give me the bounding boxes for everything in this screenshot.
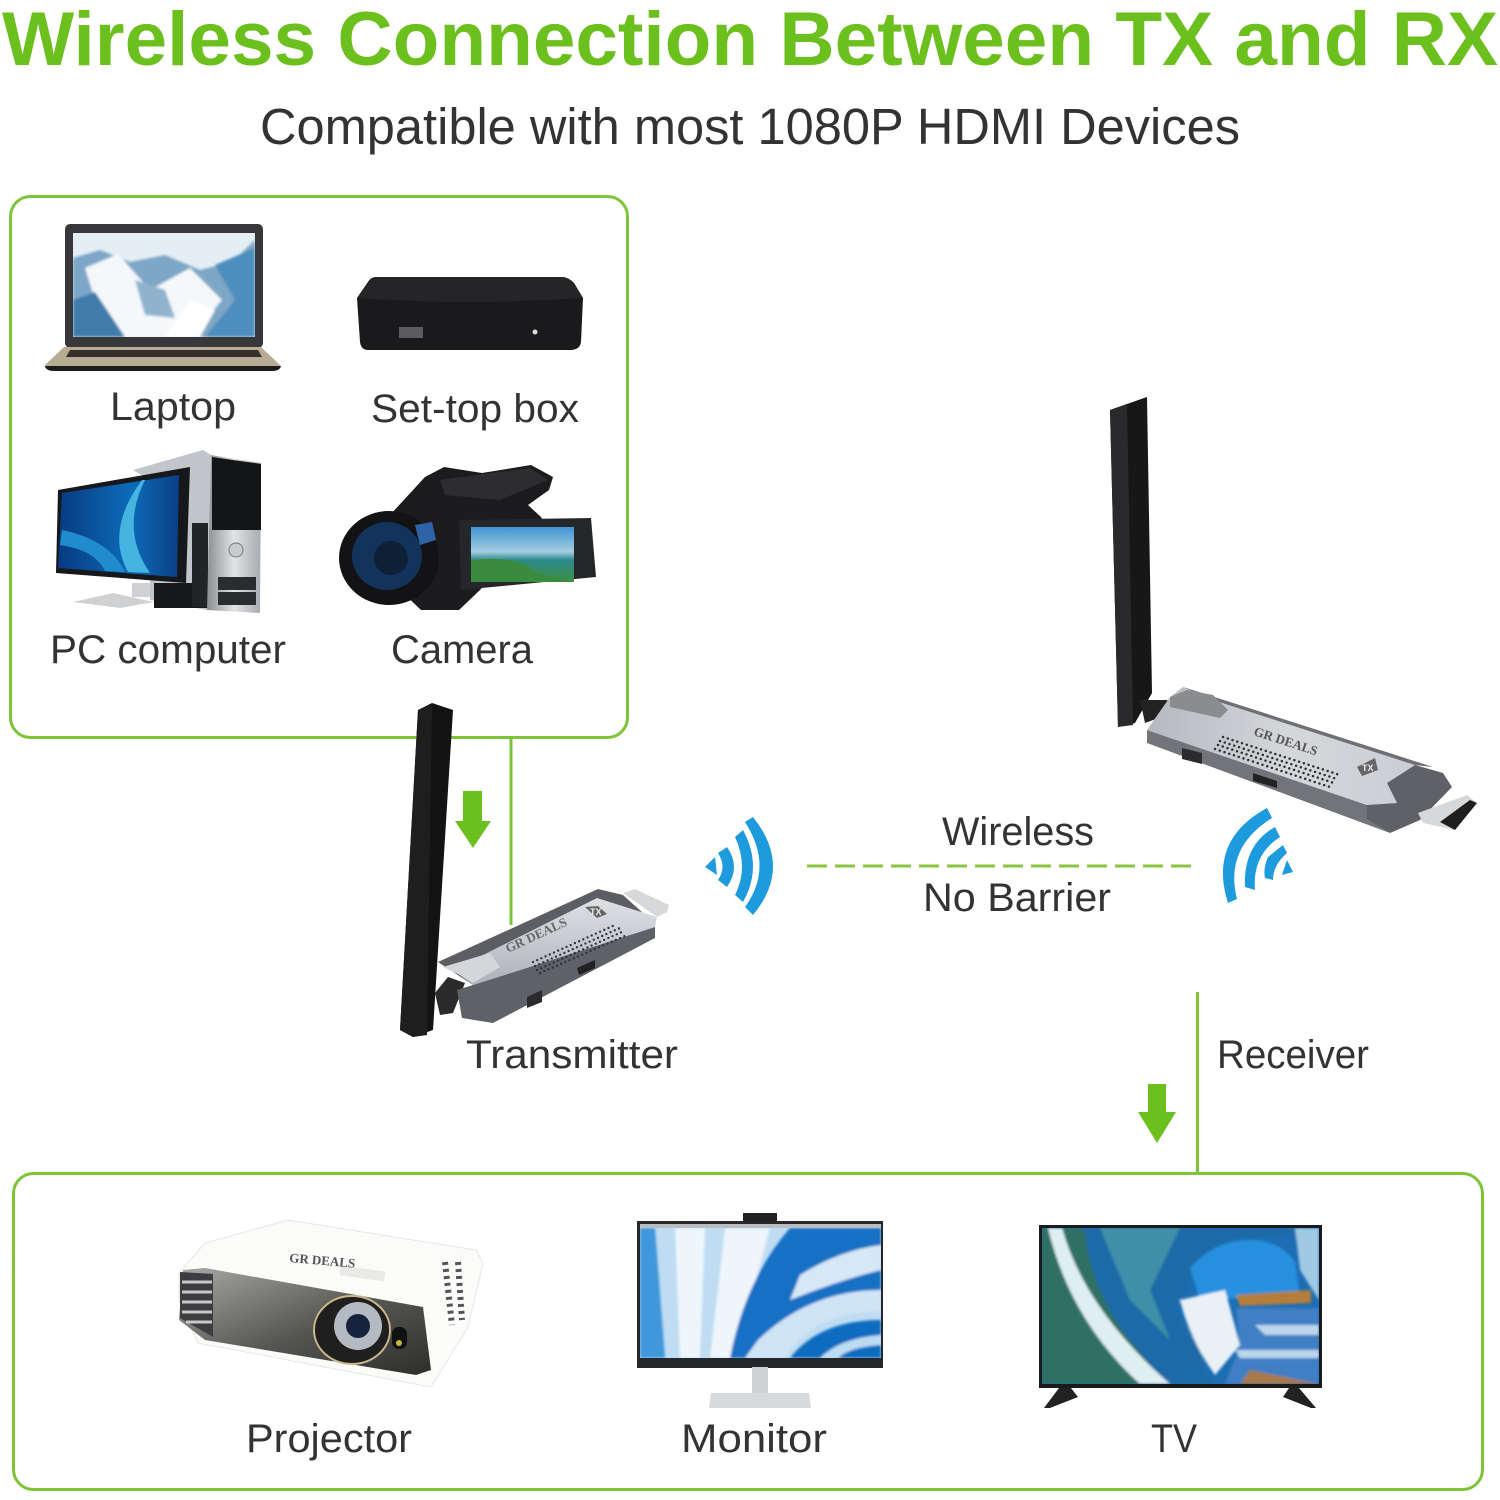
- icon: camera: [339, 465, 596, 610]
- hinge: [435, 977, 465, 1015]
- icon: TV: [1039, 1225, 1322, 1408]
- panel: source devices: [10, 196, 628, 738]
- subtitle: Compatible with most 1080P HDMI Devices: [260, 98, 1240, 155]
- top plate: [453, 898, 657, 985]
- icon: projector: GR DEALS: [289, 1250, 356, 1271]
- brand: GR DEALS: [1252, 724, 1320, 758]
- top plate: [1147, 687, 1433, 805]
- receiver device: [1110, 397, 1477, 833]
- label: laptop: Laptop: [110, 385, 236, 429]
- switch: [1182, 748, 1202, 764]
- label: monitor: Monitor: [681, 1417, 827, 1461]
- badge: [585, 906, 607, 918]
- icon: wireless waves receiver: [1223, 808, 1293, 903]
- icon: PC computer: [56, 450, 261, 613]
- label: TV: TV: [1151, 1417, 1197, 1461]
- icon: laptop: [45, 224, 281, 371]
- antenna: [1110, 397, 1152, 727]
- back edge: [1183, 687, 1433, 767]
- connector: receiver to output panel: [1196, 992, 1199, 1174]
- icon: set-top box: [357, 277, 583, 350]
- label: PC computer: PC computer: [50, 628, 286, 672]
- back edge: [438, 889, 653, 985]
- hump: [1170, 690, 1228, 718]
- label: projector: Projector: [246, 1417, 412, 1461]
- arrow: down to output panel: [1138, 1084, 1176, 1143]
- label: camera: Camera: [391, 628, 534, 672]
- badge: TX: [1362, 763, 1374, 773]
- hinge: [1140, 700, 1175, 723]
- badge: TX: [590, 907, 602, 917]
- label: receiver: Receiver: [1217, 1033, 1369, 1077]
- icon: monitor: [637, 1213, 883, 1408]
- port: [577, 960, 595, 975]
- vent dots: [533, 925, 627, 973]
- connector: [623, 889, 669, 917]
- end cap: [1367, 765, 1452, 833]
- badge: [1357, 758, 1378, 776]
- arrow: down to transmitter: [455, 791, 491, 848]
- vent dots: [1215, 737, 1340, 787]
- label: set-top box: Set-top box: [371, 387, 579, 431]
- connector: source panel to transmitter: [510, 738, 512, 925]
- label: transmitter: Transmitter: [466, 1033, 678, 1077]
- transmitter device: [400, 703, 669, 1037]
- panel: output devices: [14, 1174, 1482, 1490]
- body side: [1147, 730, 1390, 833]
- connector: [1418, 795, 1477, 830]
- brand: GR DEALS: [503, 914, 569, 956]
- link label: no barrier: No Barrier: [923, 876, 1111, 920]
- icon: projector: [179, 1220, 483, 1387]
- icon: wireless waves transmitter: [705, 817, 773, 915]
- body side: [457, 927, 655, 1023]
- antenna: [400, 703, 453, 1037]
- hump: [443, 953, 500, 983]
- link label: wireless: Wireless: [942, 810, 1094, 854]
- switch: [527, 990, 542, 1008]
- port: [1253, 773, 1277, 788]
- dashed link: [807, 864, 1193, 868]
